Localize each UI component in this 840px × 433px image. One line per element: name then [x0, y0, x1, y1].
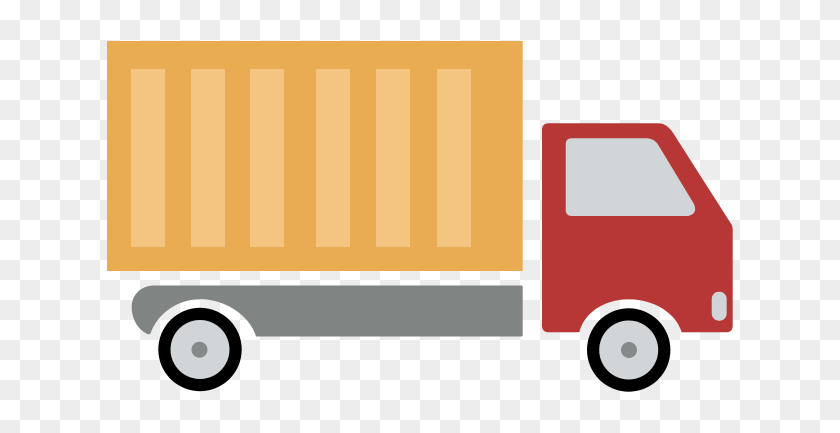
rear wheel	[158, 308, 242, 391]
headlight	[712, 292, 727, 321]
truck chassis	[132, 286, 523, 336]
cab	[542, 123, 733, 332]
front wheel	[587, 308, 670, 392]
cab window	[566, 138, 695, 216]
cargo container	[107, 41, 523, 271]
